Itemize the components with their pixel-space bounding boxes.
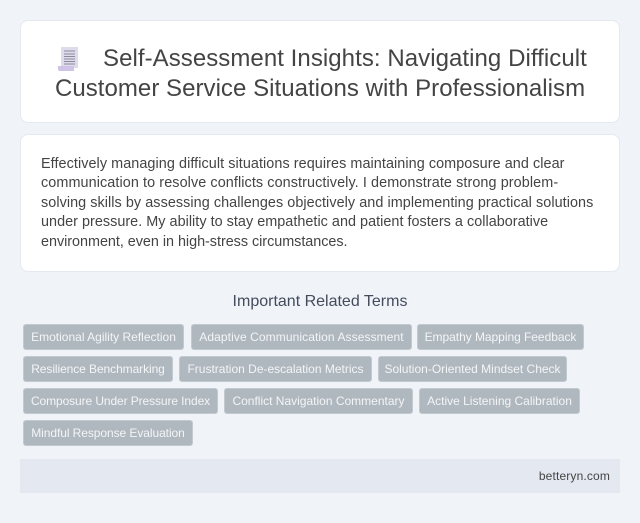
tag: Resilience Benchmarking xyxy=(31,362,165,376)
tag: Solution-Oriented Mindset Check xyxy=(384,362,561,376)
description text: Effectively managing difficult situations requires maintaining composure and clear xyxy=(41,156,565,172)
title line 1: Self-Assessment Insights: Navigating Difficult xyxy=(103,45,587,72)
tag xyxy=(417,324,584,350)
tag xyxy=(23,324,184,350)
tag xyxy=(23,356,173,382)
tag xyxy=(378,356,567,382)
title card xyxy=(20,20,620,123)
description text: under pressure. My ability to stay empathetic and patient fosters a collaborative xyxy=(41,214,548,230)
tag xyxy=(224,388,413,414)
description text xyxy=(41,156,593,250)
tag: Composure Under Pressure Index xyxy=(31,394,210,408)
footer text: site name: betteryn.com xyxy=(539,469,610,483)
tag xyxy=(179,356,372,382)
description text: communication to resolve conflicts constructively. I demonstrate strong problem- xyxy=(41,175,558,191)
tag: Mindful Response Evaluation xyxy=(31,426,185,440)
tag: Empathy Mapping Feedback xyxy=(425,330,576,344)
footer bar xyxy=(20,459,620,493)
tag: Active Listening Calibration xyxy=(427,394,572,408)
tag: Adaptive Communication Assessment xyxy=(199,330,404,344)
title line 2: Customer Service Situations with Professionalism xyxy=(55,75,585,102)
tag: Emotional Agility Reflection xyxy=(31,330,176,344)
description text: solving skills by assessing challenges objectively and implementing practical solutions xyxy=(41,194,593,210)
related terms heading: Important Related Terms xyxy=(233,293,407,310)
tag xyxy=(23,388,218,414)
tag xyxy=(419,388,580,414)
tag: Frustration De-escalation Metrics xyxy=(187,362,364,376)
tag xyxy=(23,420,193,446)
icon: document scroll xyxy=(58,47,78,71)
tag: Conflict Navigation Commentary xyxy=(232,394,405,408)
description card xyxy=(20,134,620,272)
description text: environment, even in high-stress circumstances. xyxy=(41,234,348,250)
tag xyxy=(191,324,412,350)
